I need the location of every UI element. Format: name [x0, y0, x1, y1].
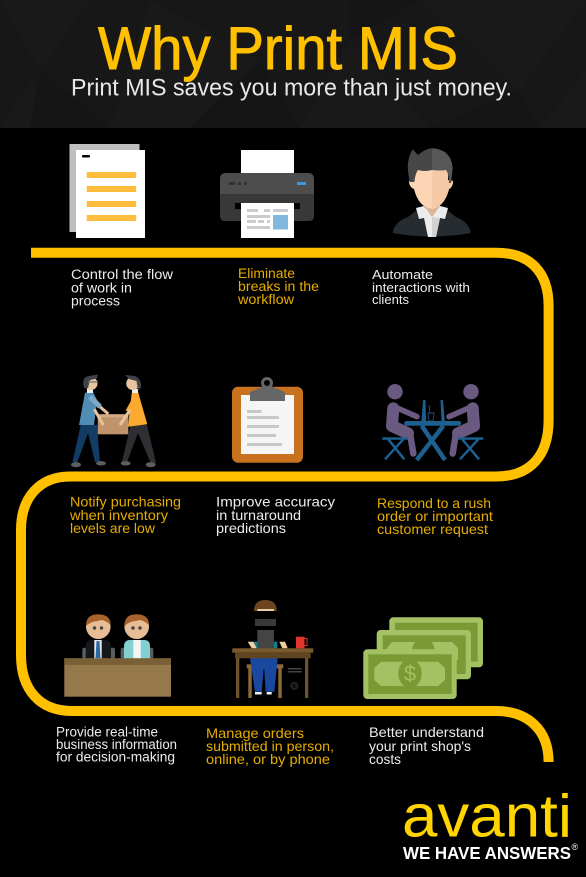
logo: avanti: WE HAVE ANSWERS	[403, 843, 571, 863]
text: respond: customer request	[377, 521, 488, 537]
text: control: Control the flow	[71, 267, 173, 282]
text: automate: Automate	[372, 267, 433, 282]
text: manage: online, or by phone	[206, 751, 330, 767]
icon: two people meeting at table	[382, 384, 483, 460]
icon: two people carrying box	[71, 374, 156, 467]
text: provide: business information	[56, 737, 177, 752]
text: manage: Manage orders	[206, 725, 304, 741]
text: control	[71, 267, 173, 308]
text: eliminate: Eliminate	[238, 266, 295, 281]
text: provide: Provide real-time	[56, 724, 158, 740]
text: improve: Improve accuracy	[216, 494, 335, 510]
text: respond: Respond to a rush	[377, 495, 491, 511]
icon: two people at desk	[64, 614, 171, 697]
logo: avanti: avanti	[402, 782, 572, 850]
text: notify: Notify purchasing	[70, 494, 181, 510]
title: Why Print MIS	[98, 15, 458, 82]
icon: businessman	[393, 148, 471, 237]
text: improve: predictions	[216, 520, 286, 536]
text: improve	[216, 494, 335, 536]
text: better: your print shop's	[369, 738, 471, 754]
logo: avanti: ®	[572, 842, 578, 852]
icon: stack of money	[363, 617, 483, 699]
text: manage	[206, 725, 334, 767]
text: respond: order or important	[377, 508, 493, 524]
text: provide: for decision-making	[56, 750, 175, 764]
text: provide	[56, 724, 177, 764]
text: eliminate: breaks in the	[238, 279, 319, 294]
icon: clipboard	[232, 378, 303, 463]
winding yellow timeline path	[21, 253, 549, 762]
text: better: Better understand	[369, 724, 484, 740]
text: manage: submitted in person,	[206, 738, 334, 754]
text: eliminate: workflow	[237, 292, 294, 307]
text: better: costs	[369, 751, 401, 767]
icon: documents	[70, 144, 145, 238]
text: automate: clients	[372, 292, 409, 307]
text: notify: when inventory	[69, 507, 168, 523]
icon: printer	[220, 150, 314, 238]
text: better	[369, 724, 484, 767]
subtitle: Print MIS saves you more than just money.	[71, 74, 512, 102]
text: control: process	[71, 294, 120, 308]
icon: stack of money: $	[404, 661, 416, 686]
text: respond	[377, 495, 493, 537]
text: automate: interactions with	[372, 280, 470, 295]
text: control: of work in	[71, 280, 132, 296]
icon: worker at computer	[232, 600, 313, 698]
text: improve: in turnaround	[216, 507, 301, 523]
text: notify	[69, 494, 181, 536]
text: automate	[372, 267, 470, 307]
text: notify: levels are low	[70, 520, 156, 536]
text: eliminate	[237, 266, 319, 307]
header band	[0, 0, 586, 128]
